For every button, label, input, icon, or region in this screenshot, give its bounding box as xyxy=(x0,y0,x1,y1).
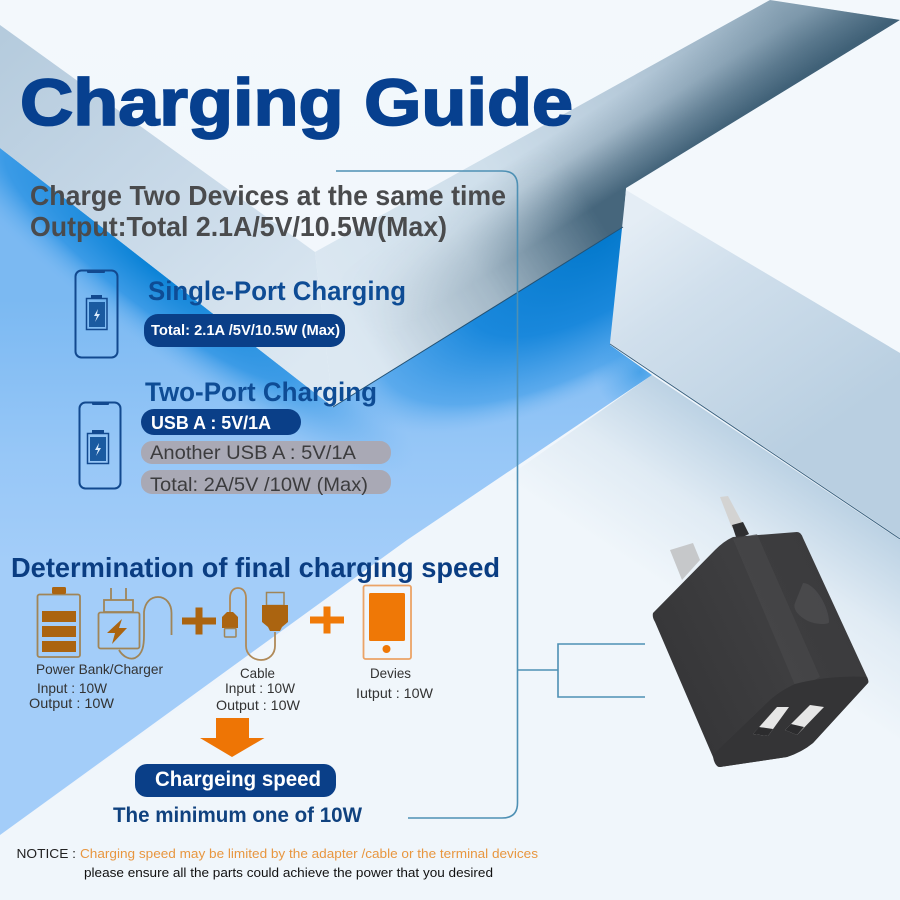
device labels: Iutput : 10W xyxy=(356,685,434,701)
icon: power bank battery xyxy=(38,587,80,657)
summary text: Output:Total 2.1A/5V/10.5W(Max) xyxy=(30,211,447,242)
summary text: Charge Two Devices at the same time xyxy=(30,180,506,211)
icon: phone with battery, single port xyxy=(76,270,118,358)
notice text xyxy=(16,846,538,880)
power bank and charger labels: Power Bank/Charger xyxy=(36,661,163,677)
adapter port face xyxy=(713,677,868,767)
pill: charging speed: Chargeing speed xyxy=(155,767,321,791)
icon: orange phone xyxy=(364,586,411,659)
icon: charger with cable xyxy=(98,588,172,659)
pill: single-port total xyxy=(144,314,345,347)
power bank and charger labels xyxy=(29,661,163,711)
pill: charging speed xyxy=(135,764,336,797)
notice text: NOTICE : xyxy=(16,846,76,861)
notice text: please ensure all the parts could achieve the power that you desired xyxy=(84,865,493,880)
power bank and charger labels: Output : 10W xyxy=(29,695,115,711)
USB ports xyxy=(753,705,824,736)
heading: determination of final charging speed: Determination of final charging speed xyxy=(11,552,500,583)
pill: single-port total: Total: 2.1A /5V/10.5W (Max) xyxy=(151,323,340,339)
adapter body xyxy=(653,532,868,767)
pill: first USB A xyxy=(141,409,301,435)
heading: two-port charging: Two-Port Charging xyxy=(145,377,377,407)
cable labels: Input : 10W xyxy=(225,680,296,696)
pill: another USB A: Another USB A : 5V/1A xyxy=(150,442,356,464)
title: Charging Guide xyxy=(20,65,573,139)
device labels xyxy=(356,665,434,701)
device labels: Devies xyxy=(370,665,411,681)
product: black dual-USB wall adapter xyxy=(653,496,868,767)
plus sign: brown xyxy=(182,608,216,634)
notice text: Charging speed may be limited by the adapter /cable or the terminal devices xyxy=(80,846,538,861)
cable labels: Cable xyxy=(240,665,275,681)
power bank and charger labels: Input : 10W xyxy=(37,680,108,696)
cable labels xyxy=(216,665,301,713)
plus sign: orange xyxy=(310,606,344,634)
result text: The minimum one of 10W xyxy=(113,804,362,827)
cable labels: Output : 10W xyxy=(216,697,301,713)
icon: phone with battery, two port xyxy=(80,402,120,488)
summary text xyxy=(30,180,506,242)
arrow: down to result xyxy=(200,718,264,757)
heading: single-port charging: Single-Port Charging xyxy=(148,276,406,306)
adapter prongs xyxy=(670,496,749,580)
pill: two-port total: Total: 2A/5V /10W (Max) xyxy=(150,474,368,496)
connector bracket line xyxy=(336,171,645,818)
pill: first USB A: USB A : 5V/1A xyxy=(151,412,271,433)
icon: cable xyxy=(222,588,288,660)
